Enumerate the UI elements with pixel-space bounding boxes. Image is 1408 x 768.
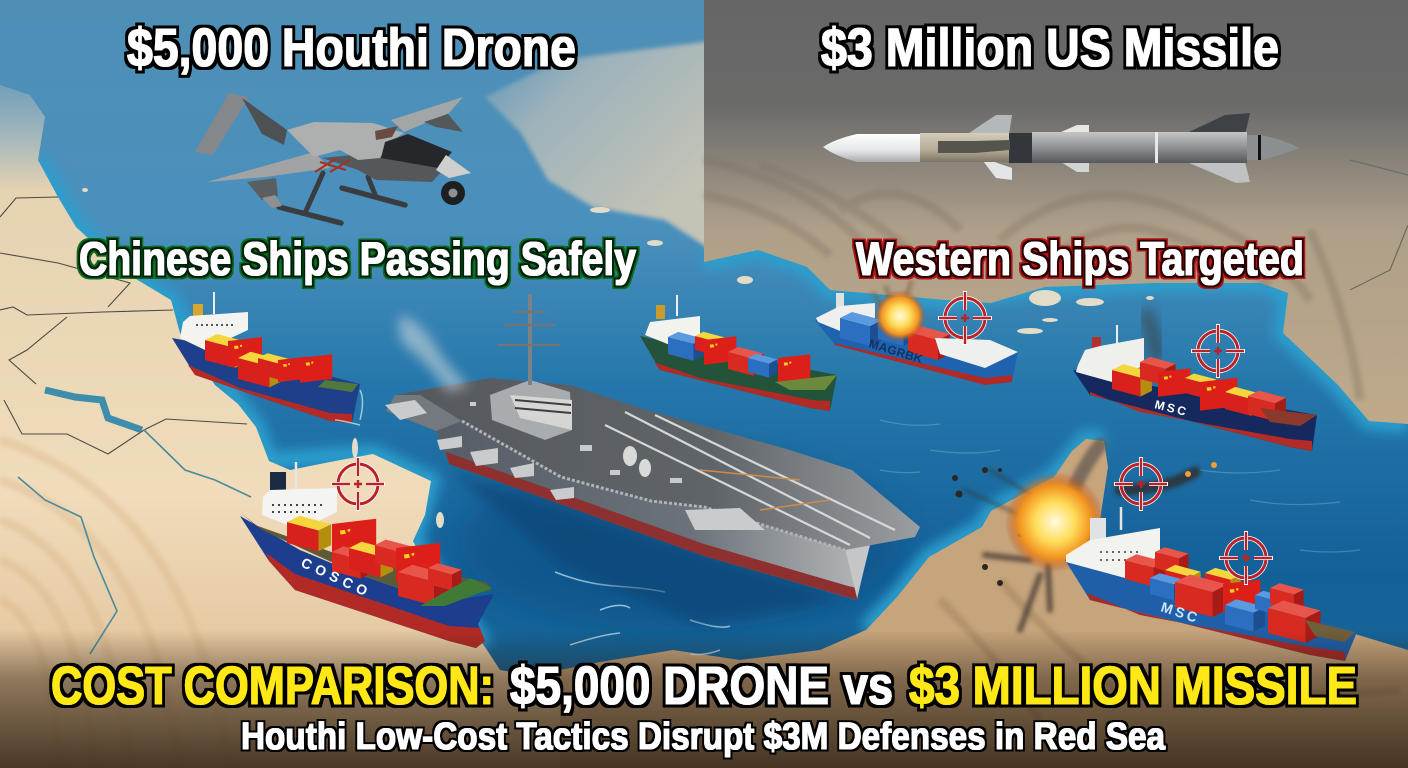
deep water around carrier <box>460 450 900 630</box>
headline: cost comparison: vs <box>843 656 893 716</box>
subheadline: Houthi Low-Cost Tactics Disrupt $3M Defenses in Red Sea <box>241 716 1166 758</box>
fire on ship <box>872 280 926 342</box>
drone wheel <box>441 181 465 205</box>
ship: Chinese cargo ship, upper left <box>172 292 360 423</box>
carrier hull <box>436 421 915 600</box>
wake and sea foam <box>335 390 730 654</box>
carrier side platforms <box>385 400 765 530</box>
land: peninsula and bottom coast <box>560 439 1408 768</box>
smoke plumes <box>965 445 1195 630</box>
drone rear wing <box>195 93 287 155</box>
ridges on the land <box>704 160 1360 400</box>
bottom dark band <box>0 630 1408 768</box>
missile fins <box>969 113 1250 183</box>
crosshair: COSCO ship <box>331 457 385 511</box>
heading: missile price: $3 Million US Missile <box>821 18 1279 78</box>
drone upper wing <box>391 97 463 132</box>
ship name: MSC: MSC <box>1153 397 1190 419</box>
land: west coast <box>0 85 560 768</box>
small islands <box>82 188 1154 528</box>
drone lower wing and engine <box>207 152 330 208</box>
grey overlay: right panel <box>704 0 1408 230</box>
sea ripples <box>620 420 1360 552</box>
ship: MSC cargo ship, lower right <box>1065 507 1357 661</box>
ship name: COSCO: COSCO <box>299 554 375 601</box>
borders and rivers <box>0 160 1408 654</box>
crosshair: Maersk ship <box>938 291 992 345</box>
crosshair: lower MSC ship <box>1219 531 1273 585</box>
ship: Maersk cargo ship, hit <box>815 280 1018 385</box>
heading: drone price: $5,000 Houthi Drone <box>127 18 576 78</box>
shallow coastal water glow <box>38 160 1408 647</box>
crosshair: upper MSC ship <box>1191 324 1245 378</box>
drone fuselage <box>287 122 471 182</box>
headline: cost comparison: $5,000 DRONE <box>510 656 829 716</box>
headline: cost comparison: COST COMPARISON: <box>51 656 494 716</box>
carrier island and mast <box>490 294 572 440</box>
panel: missile <box>823 113 1299 183</box>
carrier flight deck <box>386 378 920 550</box>
land: north-east of left panel <box>485 40 720 256</box>
headline: cost comparison <box>51 656 1357 716</box>
carrier shadow on the water <box>450 470 840 625</box>
explosion on the peninsula <box>952 445 1217 630</box>
carrier <box>385 294 920 625</box>
carrier smoke <box>399 315 470 392</box>
panel: drone <box>195 93 471 223</box>
debris <box>952 467 1022 586</box>
drone legs <box>279 173 405 223</box>
ship name: MSC: MSC <box>1159 599 1202 626</box>
crosshair: near explosion <box>1114 457 1168 511</box>
ship name: MAERSK: MAGRBK <box>867 336 925 366</box>
ship: Chinese cargo ship, centre <box>640 295 837 411</box>
label: Western ships: Western Ships Targeted <box>856 232 1304 285</box>
label: Chinese ships: Chinese Ships Passing Safely <box>79 232 636 285</box>
ship: MSC cargo ship, upper right <box>1073 310 1317 451</box>
land: Arabian side and right coast <box>704 0 1408 424</box>
wave patterns on the sand <box>0 440 230 768</box>
missile body <box>823 132 1299 163</box>
ship: COSCO cargo ship, lower left <box>240 462 494 648</box>
